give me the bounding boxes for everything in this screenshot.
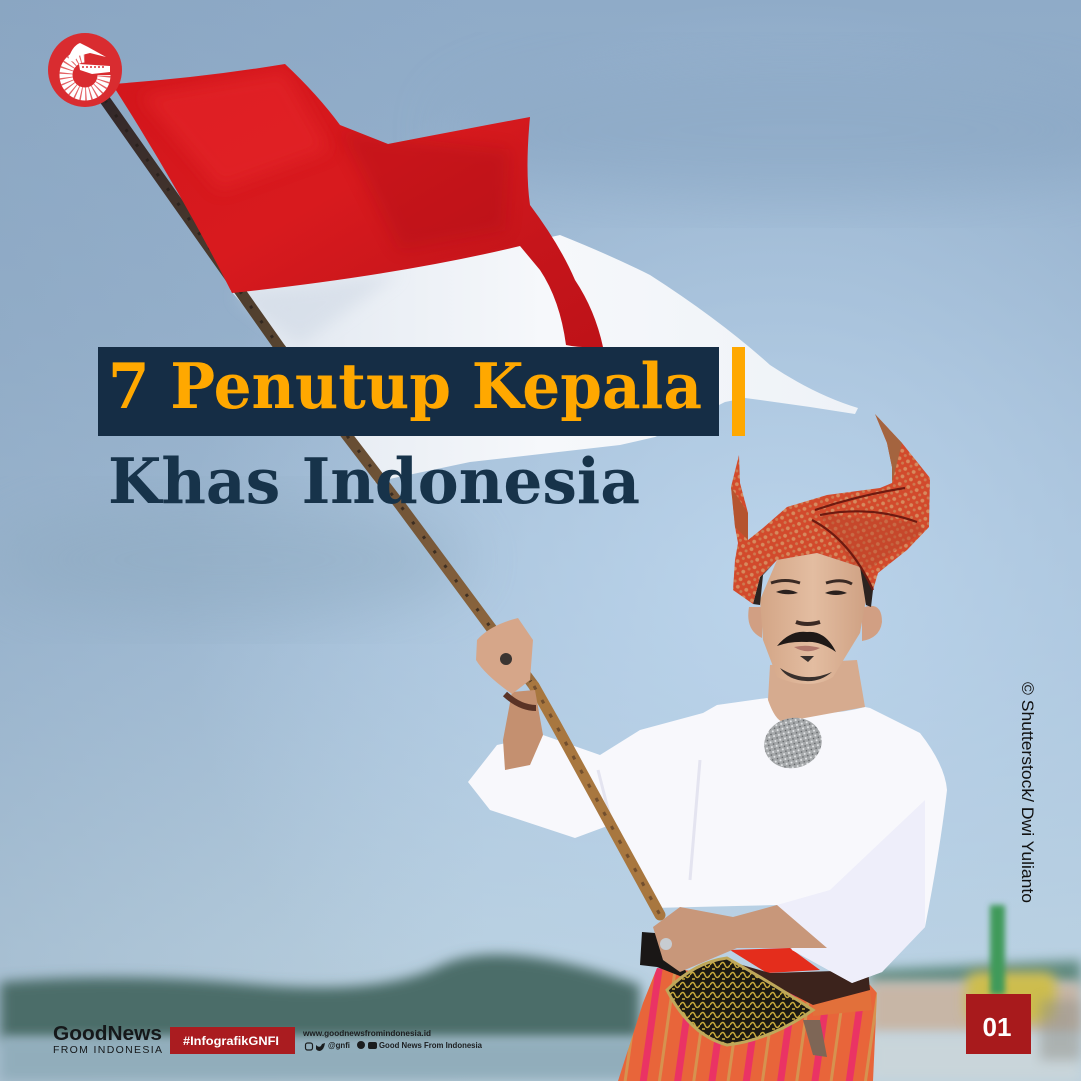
brooch bbox=[759, 711, 827, 775]
flag: white lower stripe bbox=[230, 235, 858, 482]
title line 2: Khas Indonesia bbox=[108, 444, 640, 518]
goatee bbox=[780, 656, 832, 681]
social name: Good News From Indonesia bbox=[379, 1041, 483, 1050]
face bbox=[760, 553, 866, 684]
sarong waist band bbox=[813, 990, 872, 1016]
photo credit: © Shutterstock/ Dwi Yulianto bbox=[1018, 682, 1036, 903]
icon: twitter bbox=[316, 1043, 325, 1051]
flag pole lower bbox=[534, 686, 660, 915]
footer: hashtag badge bbox=[170, 1027, 295, 1054]
white shirt bbox=[468, 698, 947, 983]
logo: GNFI red badge bbox=[48, 33, 122, 107]
waist wrap bbox=[730, 948, 820, 973]
title line 1: 7 Penutup Kepala bbox=[108, 349, 702, 423]
shirt folds bbox=[598, 760, 700, 880]
gold sheath bbox=[667, 958, 813, 1045]
social handle: @gnfi bbox=[328, 1041, 350, 1050]
person: man in traditional dress bbox=[468, 414, 947, 1081]
mouth bbox=[794, 646, 820, 651]
title highlight bar bbox=[98, 347, 719, 436]
icon: instagram bbox=[306, 1043, 312, 1050]
icon: facebook bbox=[357, 1041, 365, 1049]
icon: youtube bbox=[368, 1042, 377, 1049]
footer: GoodNews from Indonesia wordmark: GoodNews bbox=[53, 1022, 162, 1045]
flag: red upper stripe bbox=[112, 64, 603, 347]
sarong bbox=[618, 968, 877, 1081]
nose bbox=[796, 622, 820, 624]
page number badge: 01 bbox=[983, 1012, 1011, 1042]
lower forearm and hand bbox=[653, 905, 827, 972]
kris handle bbox=[762, 875, 790, 903]
turban tengkuluk bbox=[731, 414, 930, 604]
yellow accent bar bbox=[732, 347, 745, 436]
brows and eyes bbox=[771, 580, 852, 584]
flag pole upper bbox=[105, 100, 534, 686]
hair bbox=[753, 560, 873, 607]
page number badge bbox=[966, 994, 1031, 1054]
sleeve shade bbox=[777, 800, 925, 983]
left forearm and hand on pole bbox=[503, 690, 543, 770]
footer: website and social handles: www.goodnewsfromindonesia.id bbox=[302, 1029, 431, 1038]
footer: GoodNews from Indonesia wordmark: FROM INDONESIA bbox=[53, 1044, 162, 1056]
neck bbox=[768, 660, 865, 722]
footer: website and social handles bbox=[302, 1029, 483, 1051]
footer: hashtag badge: #InfografikGNFI bbox=[183, 1034, 279, 1048]
black belt bbox=[640, 932, 690, 980]
brown belt bbox=[725, 960, 870, 1005]
moustache bbox=[777, 632, 836, 652]
footer: GoodNews from Indonesia wordmark bbox=[53, 1022, 162, 1056]
ears bbox=[748, 607, 762, 638]
kris sheath end bbox=[803, 1020, 827, 1057]
